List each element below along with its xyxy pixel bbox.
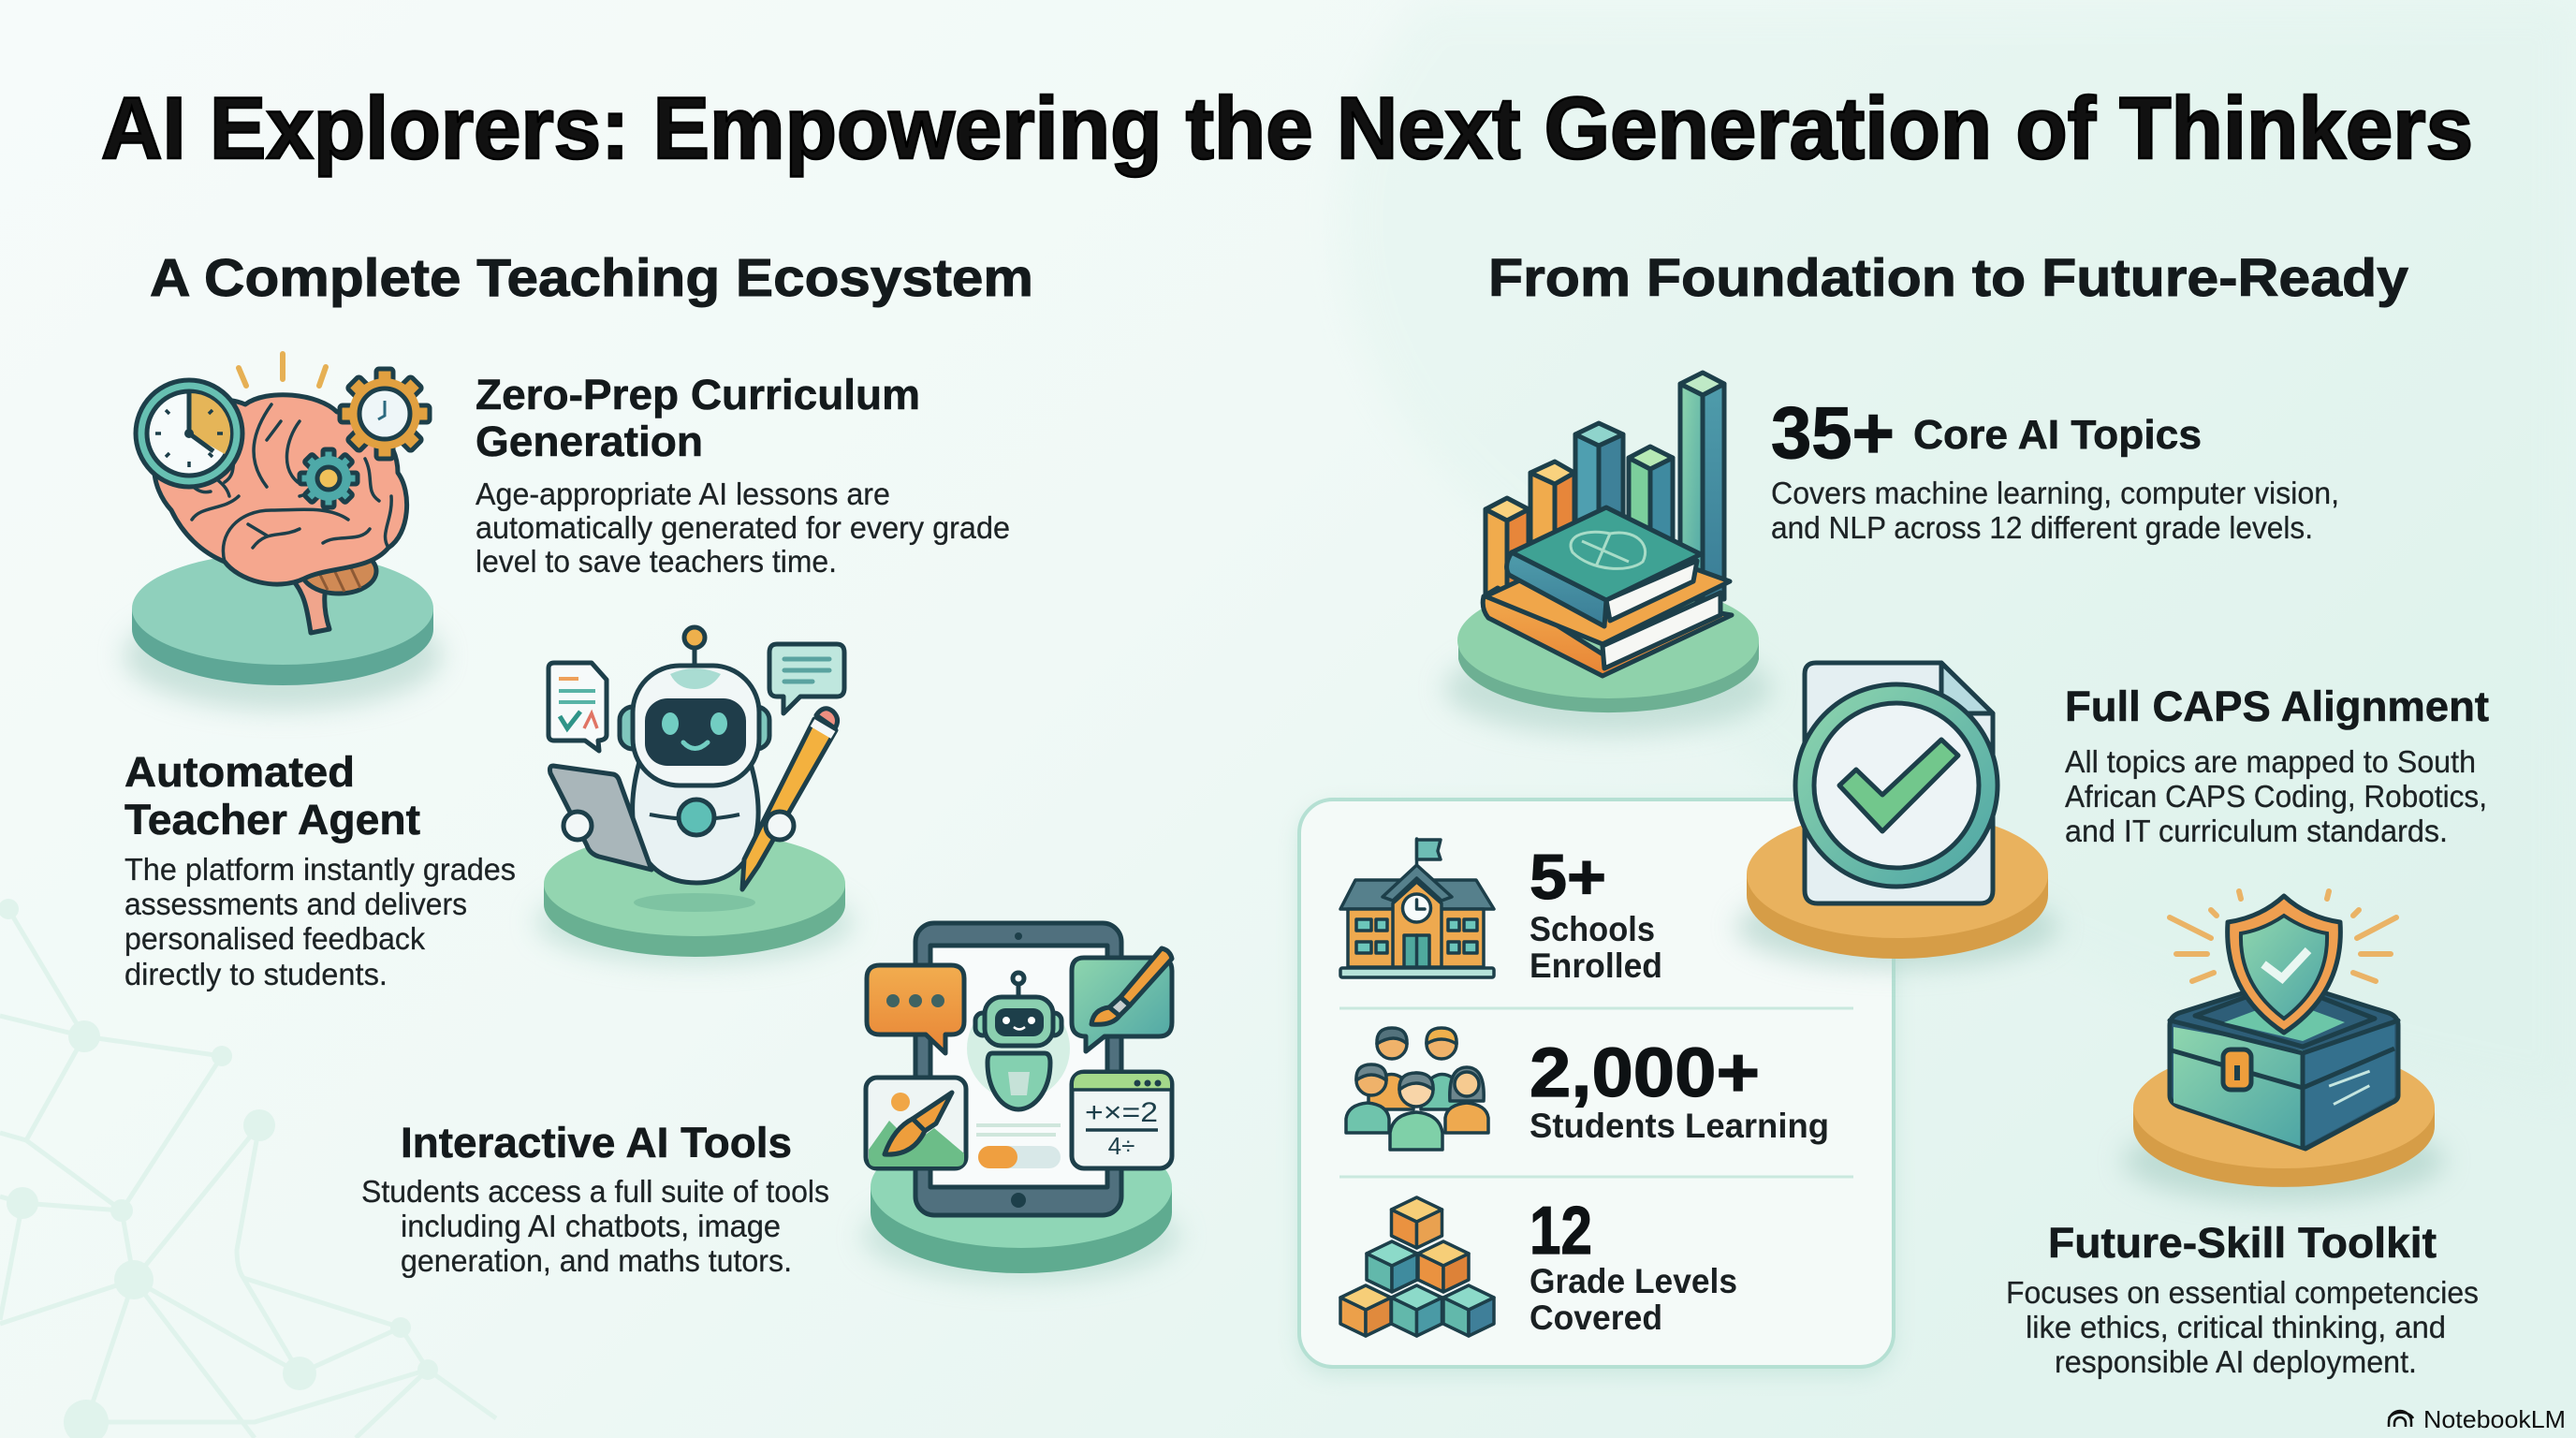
stat description: and NLP across 12 different grade levels. (1771, 510, 2313, 545)
title: AI Explorers: Empowering the Next Generation of Thinkers (101, 79, 2473, 177)
icon: shield on toolkit chest (2123, 891, 2445, 1202)
feature description: Students access a full suite of tools (361, 1174, 829, 1209)
feature description: assessments and delivers (124, 887, 467, 921)
equation (1085, 1097, 1158, 1160)
stat: schools enrolled: Schools (1530, 910, 1655, 948)
feature description: directly to students. (124, 957, 388, 991)
feature description (361, 1174, 829, 1278)
text block: future-skill toolkit (2006, 1219, 2479, 1379)
stat: schools enrolled: 5+ (1530, 842, 1606, 913)
stat: students learning (1530, 1034, 1829, 1145)
text block: interactive AI tools (361, 1119, 829, 1278)
background network pattern (0, 899, 496, 1438)
feature description: responsible AI deployment. (2055, 1344, 2417, 1379)
equation: 4÷ (1108, 1132, 1134, 1160)
stat: students learning: Students Learning (1530, 1107, 1829, 1145)
stat: grade levels covered: 12 (1530, 1194, 1592, 1269)
stat description (1771, 476, 2339, 545)
feature description: personalised feedback (124, 921, 425, 956)
feature description (476, 477, 1010, 579)
feature description (2065, 744, 2487, 848)
icon: alphabet blocks (1340, 1197, 1494, 1336)
feature heading (124, 748, 420, 844)
stat heading (1771, 391, 2202, 474)
watermark: NotebookLM: NotebookLM (2423, 1405, 2566, 1433)
icon: brain with clock and gears (124, 354, 442, 710)
text block: full CAPS alignment (2065, 682, 2489, 848)
stat: students learning: 2,000+ (1530, 1034, 1760, 1111)
stat heading: Core AI Topics (1913, 412, 2202, 458)
icon: school (1340, 839, 1494, 977)
feature heading (476, 371, 920, 465)
feature heading: Generation (476, 418, 703, 465)
icon: students group (1346, 1028, 1488, 1150)
heading: teaching ecosystem: A Complete Teaching Ecosystem (150, 248, 1033, 308)
feature heading: Automated (124, 748, 355, 796)
feature description: generation, and maths tutors. (401, 1243, 792, 1278)
feature description: Focuses on essential competencies (2006, 1275, 2479, 1310)
feature description: African CAPS Coding, Robotics, (2065, 779, 2487, 814)
stat: grade levels covered: Covered (1530, 1299, 1662, 1337)
stat: schools enrolled (1530, 842, 1662, 985)
icon: tablet with AI tools (862, 923, 1180, 1283)
icon: robot teacher agent (535, 627, 854, 964)
stat description: Covers machine learning, computer vision, (1771, 476, 2339, 510)
text block: zero-prep curriculum generation (476, 371, 1010, 579)
feature description: Age-appropriate AI lessons are (476, 477, 890, 511)
feature description: including AI chatbots, image (401, 1209, 781, 1243)
feature description: and IT curriculum standards. (2065, 814, 2448, 848)
stat heading: 35+ (1771, 391, 1895, 474)
text block: 35+ core AI topics (1771, 391, 2339, 545)
feature heading: Zero-Prep Curriculum (476, 371, 920, 418)
feature description: automatically generated for every grade (476, 510, 1010, 545)
feature description (124, 852, 516, 991)
feature description: level to save teachers time. (476, 544, 837, 579)
text block: automated teacher agent (124, 748, 516, 991)
feature heading: Interactive AI Tools (401, 1119, 792, 1167)
feature description: The platform instantly grades (124, 852, 516, 887)
feature heading: Teacher Agent (124, 796, 420, 844)
stat: grade levels covered: Grade Levels (1530, 1262, 1737, 1300)
panel: stats card (1299, 800, 1894, 1374)
stat: grade levels covered (1530, 1194, 1737, 1337)
feature description (2006, 1275, 2479, 1379)
stat: schools enrolled: Enrolled (1530, 946, 1662, 985)
icon: books and bar chart (1444, 373, 1772, 735)
feature description: All topics are mapped to South (2065, 744, 2476, 779)
feature heading: Full CAPS Alignment (2065, 682, 2489, 730)
feature heading: Future-Skill Toolkit (2048, 1219, 2437, 1267)
feature description: like ethics, critical thinking, and (2026, 1310, 2446, 1344)
heading: foundation to future-ready: From Foundation to Future-Ready (1488, 248, 2408, 308)
equation: +×=2 (1085, 1097, 1158, 1128)
icon: CAPS document with check (1736, 663, 2058, 968)
